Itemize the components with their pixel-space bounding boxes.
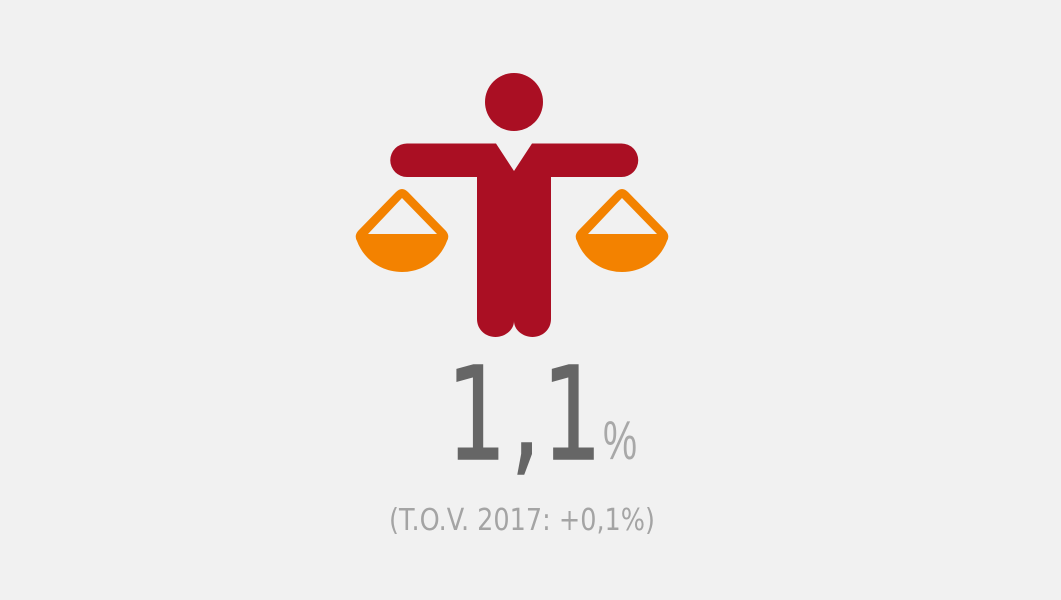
percent sign: % xyxy=(603,409,637,471)
main figure: 1,1 xyxy=(447,339,602,490)
comparison note: (T.O.V. 2017: +0,1%) xyxy=(389,503,655,538)
icon: right scale xyxy=(576,189,668,272)
icon: person head xyxy=(485,73,543,131)
icon: person body and arms xyxy=(390,144,638,337)
icon: left scale xyxy=(356,189,448,272)
icon: person holding scales xyxy=(356,73,668,337)
